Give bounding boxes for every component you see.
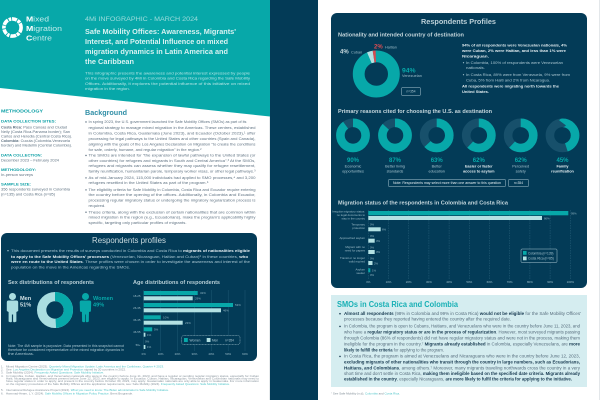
- panel heading: SMOs in Costa Rica and Colombia: [337, 300, 459, 309]
- methodology sidebar: Neily (Costa Rica-Panama border); San: [1, 130, 70, 134]
- intro paragraph: on the move surveyed by 4Mi in Colombia and Costa Rica regarding the Safe Mobility: [85, 77, 250, 81]
- panel bullets: short time and don't settle in Costa Rica, making them ineligible based on the specified date criteria. Migrants already: [344, 371, 581, 376]
- bar chart: migration status: Approached asylum: [339, 236, 366, 240]
- donut: 63% better education: education: [428, 169, 445, 173]
- bar chart: migration status: 50%: [466, 280, 473, 284]
- bar chart: migration status: protection: [352, 226, 365, 230]
- footnotes: International Refugee Assistance Project (2024). What you need to know: The Biden administration's Safe Mobility Initiative.: [6, 388, 169, 392]
- background bullets: the country before the opening of the offices. Additionally, in Colombia and Ecuador,: [88, 193, 256, 197]
- legend: migration status: Costa Rica (n=85): [528, 257, 554, 261]
- sampling note: therefore be considered representative of the mixed migration dynamics in: [8, 348, 124, 352]
- bar chart: migration status: 3%: [376, 250, 381, 254]
- bar chart: migration status: 6%: [382, 228, 387, 232]
- donut: 62% perceived safety: 62%: [515, 158, 527, 164]
- methodology sidebar: Colombia: Cucuta (Colombia-Venezuela: [1, 139, 71, 143]
- bar chart: migration status: 0%: [370, 234, 375, 238]
- donut: 63% better education: [424, 123, 449, 173]
- title: [85, 29, 236, 66]
- nationality summary text: were Cuban, 2% were Haitian, and less than 1% were: [461, 49, 566, 53]
- donut: 90% economic opportunities: 90%: [347, 158, 360, 164]
- footnotes: In Colombia, Cuban, Haitian, and Venezuelan nationals who were in the country before June 11, 2023, and have a regular or pending regular migratory status, especially for Cuban: [6, 374, 259, 378]
- bar chart: migration status: Migrant with no: [345, 245, 365, 249]
- nationality summary text: 94% of all respondents were Venezuelan nationals, 4%: [462, 44, 568, 48]
- bar chart: age: 0%: [145, 340, 150, 344]
- footnotes: on the migratory procedures of the Safe Mobility Offices and the application requirements, see: Safe Mobility (2024). Frequently Asked Questions: Safe Mobility Initiative.: [6, 382, 230, 386]
- heading: sex distribution: Sex distributions of respondents: [8, 280, 94, 286]
- background bullets: refugees and migrants can assess whether they may qualify for refugee resettlement,: [88, 164, 256, 168]
- panel bullets: processes because they reported having entered the country after the required date.: [344, 317, 511, 322]
- legend: migration status: [521, 249, 557, 262]
- women label: 49%: [93, 302, 104, 308]
- nationality summary text: In Colombia, 100% of respondents were Venezuelan: [466, 61, 563, 65]
- panel: respondents profiles (right): [331, 13, 587, 288]
- women label: Women: [93, 296, 114, 302]
- bar chart: migration status: no legal documents to: [337, 213, 365, 217]
- title: the Caribbean: [85, 59, 134, 66]
- bar chart: migration status: stay in the country: [342, 216, 366, 220]
- infographic date line: 4Mi INFOGRAPHIC - MARCH 2024: [85, 16, 199, 23]
- bar chart: age: 5%: [154, 328, 159, 332]
- nationality summary text: [461, 44, 570, 94]
- icon: man: [7, 293, 18, 322]
- bar chart: age: 18-25: [133, 294, 141, 298]
- bar chart: age: 10%: [163, 316, 169, 320]
- bar chart: migration status: 80%: [527, 280, 533, 284]
- bar chart: migration status: 40%: [446, 280, 452, 284]
- panel bullets: established in the country , especially Nicaraguans, are more likely to fulfil the criteria for applying to the initiative.: [344, 377, 572, 382]
- panel bullets: [339, 311, 581, 382]
- background bullets: in Colombia, Costa Rica, Guatemala (June 2023), and Ecuador (October 2023),¹ offer: [88, 131, 256, 135]
- bar chart: age: 40%: [208, 352, 215, 356]
- donut chart: nationality: [359, 56, 394, 92]
- bar chart: age: 53%: [235, 303, 241, 307]
- donut: 62% perceived safety: Perceived: [512, 164, 529, 168]
- panel intro text: were en route to the United States . These profiles were chosen in order to investigate the awareness and interest of the: [10, 260, 250, 264]
- bar chart: age: 26-35: [133, 306, 141, 310]
- background bullets: mixed migration in the region (e.g., Ecuadorians), make the program's applicability highly: [88, 216, 256, 220]
- donut: 62% perceived safety: [508, 123, 533, 173]
- header banner: [0, 0, 270, 116]
- intro paragraph: This infographic presents the awareness and potential interest expressed by people: [85, 71, 250, 75]
- bar chart: migration status: Transit or no longer: [340, 256, 365, 260]
- panel intro text: population on the move in the Americas regarding the SMOs.: [11, 266, 130, 270]
- methodology sidebar: DATA COLLECTION:: [1, 152, 42, 158]
- legend: migration status: Colombia (n=139): [528, 251, 553, 255]
- bar chart: age: 0%: [142, 352, 146, 356]
- bar chart: migration status: 0%: [370, 222, 375, 226]
- nationality summary text: nationals.: [466, 66, 485, 70]
- bar chart: migration status: 10%: [386, 280, 392, 284]
- footnotes: 5.: [1, 388, 4, 392]
- sampling note: the Americas.: [8, 352, 34, 356]
- bar chart: age: 10%: [158, 352, 164, 356]
- bar chart: migration status: 0%: [366, 280, 371, 284]
- sampling note: [8, 344, 124, 356]
- bar chart: migration status: 100%: [567, 280, 574, 284]
- panel heading: Respondents Profiles: [421, 17, 496, 26]
- donut: 87% better living standards: Better living: [385, 164, 405, 168]
- background bullets: The eligibility criteria for Safe Mobility in Colombia, Costa Rica and Ecuador require entering: [88, 188, 256, 192]
- donut: 90% economic opportunities: Economic: [345, 164, 361, 168]
- bar chart: migration status: 0%: [370, 273, 375, 277]
- men label: [20, 296, 32, 308]
- donut: 62% perceived safety: safety: [516, 169, 526, 173]
- footnotes: 6.: [1, 391, 4, 395]
- bar chart: migration status: 60%: [487, 280, 493, 284]
- bar chart: migration status: 20%: [406, 280, 412, 284]
- panel bullets: likely to fulfill the criteria for applying to the program.: [344, 347, 444, 352]
- logo wordmark: Migration: [26, 24, 62, 33]
- heading: nationality: Nationality and intended country of destination: [338, 32, 464, 38]
- donut: 87% better living standards: [382, 123, 408, 173]
- bar chart: age: 46-55: [133, 330, 141, 334]
- nationality summary text: In Costa Rica, 89% were from Venezuela, 9% were from: [466, 73, 570, 77]
- panel bullets: through Colombia (86% of respondents) did not have regular migratory status and were not in the process, making them: [344, 336, 581, 341]
- background bullets: [85, 120, 256, 225]
- donut labels: [340, 44, 422, 78]
- bar chart: migration status: [332, 210, 577, 284]
- donut: 45% family reunification: 45%: [556, 158, 569, 164]
- panel intro text: This document presents the results of surveys conducted in Colombia and Costa Rica to migrants of nationalities eligible: [11, 249, 250, 253]
- footnotes: [1, 365, 259, 395]
- bar chart: migration status: Temporary: [351, 222, 366, 226]
- bar chart: migration status: Irregular migratory status:: [332, 210, 365, 214]
- methodology sidebar: METHODOLOGY: [1, 109, 43, 114]
- donut labels: Cuban: [351, 50, 362, 54]
- sample size box: n=354: [407, 90, 416, 94]
- donut chart: sex: [42, 297, 68, 323]
- background bullets: refugees resettled in the United States as part of the program.⁵: [88, 181, 209, 185]
- methodology sidebar: DATA COLLECTION SITES:: [1, 118, 56, 124]
- bar chart: migration status: 3%: [376, 239, 381, 243]
- bar chart: migration status: 86%: [544, 216, 550, 220]
- footnotes: Haiti, Nicaraguans and Venezuelans present before June 12, 2023, are eligible to apply. In Ecuador, Cuban, Haitian, Nicaraguan, Venezuelan and Colombian nationals may need to: [6, 377, 259, 381]
- footnotes: 3.: [1, 371, 4, 375]
- sample box: n=354: [514, 181, 523, 185]
- icon: woman: [80, 293, 91, 322]
- donut labels: 94%: [402, 68, 416, 74]
- logo wordmark: Centre: [26, 34, 52, 42]
- background bullets: specific, targeting only particular profiles of migrants.: [88, 221, 186, 225]
- bar chart: migration status: 0%: [370, 246, 375, 250]
- donut labels: Venezuelan: [402, 74, 422, 78]
- bar chart: migration status: need for papers: [345, 248, 366, 252]
- donut: 62% easier or faster access to asylum: access to asylum: [463, 169, 495, 173]
- donut: 90% economic opportunities: [340, 123, 366, 173]
- intro paragraph: Offices. Additionally, it explores the potential influence of this initiative on mixed: [85, 82, 250, 86]
- background bullets: required.: [88, 204, 106, 208]
- panel bullets: Almost all respondents (98% in Colombia and 99% in Costa Rica) would not be eligible for the Safe Mobility Offices': [344, 311, 581, 316]
- bar chart: age: 30%: [192, 352, 198, 356]
- legend: age chart: n=354: [225, 338, 234, 342]
- logo wordmark: Mixed: [26, 14, 49, 24]
- note box: [388, 179, 506, 187]
- background bullets: These criteria, along with the exclusion of certain nationalities that are common within: [88, 210, 256, 214]
- women label: [93, 296, 114, 308]
- bar chart: age: 36-45: [133, 318, 141, 322]
- background bullets: other countries) for refugees and migrants in South and Central America".³ At the SMOs,: [88, 159, 256, 163]
- donut: 90% economic opportunities: opportunities: [342, 169, 364, 173]
- donut: 63% better education: 63%: [431, 158, 443, 164]
- bar chart: age: 46%: [223, 308, 229, 312]
- background bullets: processing regular migratory status or undergoing the migratory regularization process is: [88, 198, 256, 202]
- donut: 62% easier or faster access to asylum: [463, 123, 495, 173]
- sample box: [508, 179, 528, 187]
- panel intro text: to apply to the Safe Mobility Offices' processes (Venezuelan, Nicaraguan, Haitian and Cuban)⁶ in these countries, who: [11, 255, 249, 259]
- methodology sidebar: (n=135) and Costa Rica (n=85): [1, 192, 56, 196]
- footnotes: have regular status in order to apply, and present in the country before October 30, 2023, may apply. Guatemalan nationals are only able to apply in Guatemala. For more information: [6, 379, 259, 383]
- background bullets: As of mid-January 2024, 115,000 individuals had applied to SMO processes,⁴ and 3,200: [88, 176, 256, 180]
- methodology sidebar: December 2023 – February 2024: [1, 158, 59, 162]
- background bullets: The SMOs are intended for "the expansion of lawful pathways to the United States (or: [88, 154, 256, 158]
- bar chart: age: 60%: [242, 352, 248, 356]
- donut labels: 4%: [340, 49, 349, 55]
- bar chart: age: 50%: [225, 352, 232, 356]
- bar chart: age: 1%: [147, 333, 152, 337]
- methodology sidebar: METHODOLOGY:: [1, 167, 36, 172]
- donut: 87% better living standards: 87%: [389, 158, 402, 164]
- bar chart: migration status: 30%: [426, 280, 432, 284]
- footnotes: 2.: [1, 368, 4, 372]
- heading: age distribution: Age distributions of respondents: [133, 280, 220, 286]
- nationality summary text: All respondents were migrating north towards the: [462, 85, 559, 89]
- footer note: ⁷ See Safe Mobility (n.d), Colombia and Costa Rica.: [331, 391, 400, 395]
- donut: 45% family reunification: reunification: [551, 169, 575, 173]
- background bullets: processing for legal pathways to the United States and other countries (Spain and Canada),: [88, 137, 256, 141]
- bar chart: migration status: Asylum: [356, 268, 366, 272]
- background bullets: regional strategy to manage mixed migration in the Americas. These centres, established: [88, 126, 256, 130]
- footnotes: 1.: [1, 365, 4, 369]
- donut: 87% better living standards: standards: [387, 169, 403, 173]
- nationality summary text: United States.: [462, 90, 489, 94]
- note box: Note: Respondents may select more than one answer to this question: [393, 181, 501, 185]
- title: Safe Mobility Offices: Awareness, Migrants': [85, 29, 236, 36]
- bar chart: migration status: 90%: [547, 280, 553, 284]
- men label: Men: [20, 296, 32, 302]
- panel bullets: Haitians, and Colombians , among others.⁷ Moreover, many migrants traveling northwards cross the country in a very: [344, 365, 581, 370]
- title: migration dynamics in Latin America and: [85, 49, 228, 56]
- icon: MMC logo: [4, 19, 21, 36]
- intro paragraph: [85, 71, 250, 91]
- donut labels: Haitian: [385, 45, 397, 49]
- footnotes: Mixed Migration Centre (2023). Quarterly Mixed Migration Update: Latin America and the Caribbean, Quarter 4 2023.: [6, 365, 164, 369]
- footnotes: See: Los Angeles Declaration on Migration and Protection signed by 20 countries in 2022.: [6, 368, 126, 372]
- legend: age chart: [182, 336, 240, 344]
- donut: 62% easier or faster access to asylum: 62%: [473, 158, 485, 164]
- background bullets: family reunification, humanitarian parole, temporary worker visas, or other legal pathways.³: [88, 170, 256, 174]
- background heading: Background: [85, 108, 127, 117]
- bar chart: age: 23%: [185, 321, 191, 325]
- panel bullets: In Costa Rica, the program is aimed at Venezuelans and Nicaraguans who were in the country before June 12, 2023,: [344, 354, 580, 359]
- heading: migration status: Migration status of the respondents in Colombia and Costa Rica: [338, 200, 508, 206]
- panel bullets: who have a regular migratory status or are in the process of regularization . However, most surveyed migrants passing: [344, 329, 581, 334]
- bar chart: age: 32%: [200, 291, 206, 295]
- methodology sidebar: [1, 109, 72, 196]
- panel: SMOs in Costa Rica and Colombia: [331, 295, 587, 387]
- methodology sidebar: SAMPLE SIZE:: [1, 182, 31, 186]
- legend: age chart: Women: [190, 338, 201, 342]
- panel bullets: excluding migrants of other nationalities who transit through the country in large numbers, such as Ecuadorians,: [344, 360, 580, 365]
- background bullets: aligning with the goals of the Los Angeles Declaration on Migration "to create the conditions: [88, 142, 256, 146]
- footnotes: Hammad-Hearn, L.Y. (2024). Safe Mobility Offices in Migration Policy Practice. Brent Brogrande.: [6, 391, 133, 395]
- title: Interest, and Potential Influence on mixed: [85, 39, 228, 46]
- bar chart: migration status: 0%: [370, 256, 375, 260]
- bar chart: migration status: 99%: [571, 212, 577, 216]
- panel intro text: [7, 249, 250, 270]
- footnotes: 4.: [1, 374, 4, 378]
- panel heading: Respondents profiles: [92, 236, 166, 245]
- bar chart: age: 1%: [147, 345, 152, 349]
- background bullets: In spring 2023, the U.S. government launched the Safe Mobility Offices (SMOs) as part of its: [88, 120, 247, 124]
- bar chart: migration status: 70%: [507, 280, 513, 284]
- bar chart: migration status: seeker: [356, 271, 365, 275]
- bar chart: age: 56+: [136, 343, 141, 347]
- men label: 51%: [20, 302, 31, 308]
- donut: 63% better education: Better: [432, 164, 442, 168]
- nationality summary text: Nicaraguan.: [462, 54, 489, 58]
- methodology sidebar: 356 respondents surveyed in Colombia: [1, 187, 71, 191]
- bar chart: migration status: 1%: [372, 268, 377, 272]
- panel bullets: In Colombia, the program is open to Cubans, Haitians, and Venezuelans who were in the country before June 11, 2023, and: [344, 324, 581, 329]
- footnotes: Safe Mobility (2024). Frequently Asked Questions: Safe Mobility Initiative.: [6, 371, 104, 375]
- bar chart: age: 29%: [195, 296, 201, 300]
- donut: 45% family reunification: [550, 123, 575, 173]
- intro paragraph: migration in the region.: [85, 87, 130, 91]
- methodology sidebar: border) and Medellin (Central Colombia).: [1, 143, 72, 147]
- background bullets: for safe, orderly, humane, and regular migration" in the region.²: [88, 148, 202, 152]
- nationality summary text: Cuba, 5% from Haiti and 2% from Nicaragua.: [466, 78, 550, 82]
- donut labels: 2%: [374, 44, 383, 50]
- sampling note: Note: The 4Mi sample is purposive. Data presented in this snapshot cannot: [8, 344, 124, 348]
- bar chart: migration status: valid expired: [349, 260, 365, 264]
- methodology sidebar: In-person surveys: [1, 173, 33, 177]
- dark centre band: [270, 0, 318, 400]
- bar chart: migration status: 2%: [374, 262, 379, 266]
- methodology sidebar: Carlos and Heredia (Central Costa Rica).: [1, 134, 72, 138]
- methodology sidebar: Costa Rica: Paso Canoas and Ciudad: [1, 125, 67, 129]
- bar chart: age: [133, 290, 248, 356]
- sample size box: [402, 88, 420, 96]
- donut: 45% family reunification: Family: [556, 164, 569, 168]
- donut: 62% easier or faster access to asylum: Easier or faster: [465, 164, 493, 168]
- panel bullets: ineligible for the program in the country.⁷ Migrants already established in Colombia, especially Venezuelans, are more: [344, 342, 581, 347]
- logo wordmark: [26, 14, 62, 42]
- heading: primary reasons: Primary reasons cited for choosing the U.S. as destination: [338, 109, 492, 115]
- legend: age chart: Men: [212, 338, 218, 342]
- bar chart: age: 20%: [175, 352, 181, 356]
- panel: respondents profiles (left): [1, 233, 257, 361]
